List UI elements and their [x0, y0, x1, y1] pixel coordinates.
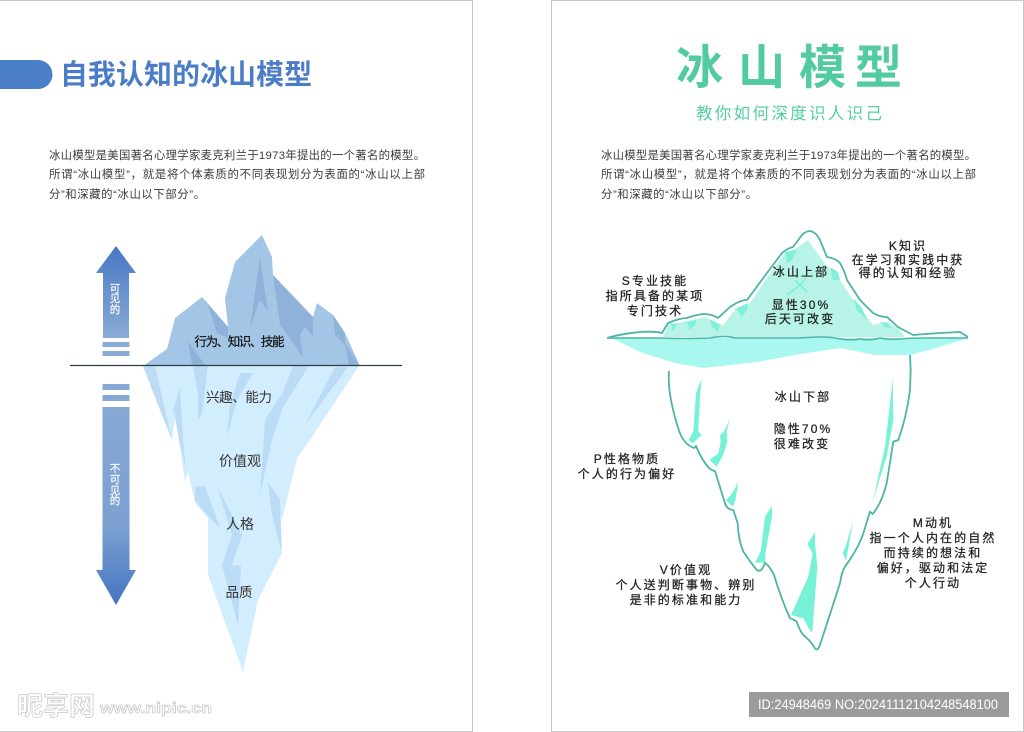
- callout: S skill: 专门技术: [627, 303, 683, 318]
- callout: V values: 个人送判断事物、辨别: [615, 577, 757, 592]
- callout: P personality: [578, 451, 676, 481]
- heading: self-awareness iceberg model: 自我认知的冰山模型: [60, 59, 312, 90]
- callout: K knowledge: 在学习和实践中获: [852, 252, 964, 267]
- callout: M motivation: M动机: [913, 516, 953, 530]
- callout: M motivation: 个人行动: [905, 576, 961, 590]
- callout: V values: V价值观: [660, 562, 712, 577]
- callout: V values: [615, 562, 757, 607]
- panel: left page: [0, 0, 472, 732]
- arrow: visible (up): 见: [110, 293, 120, 305]
- iceberg labels: [194, 335, 285, 600]
- subtitle: 教你如何深度识人识己: [696, 104, 882, 123]
- text block: left intro: [49, 148, 425, 201]
- iceberg labels: 价值观: [219, 453, 261, 469]
- label: above iceberg: 后天可改变: [765, 311, 835, 326]
- callout: S skill: 指所具备的某项: [606, 288, 704, 303]
- callout: S skill: S专业技能: [622, 273, 688, 288]
- callout: K knowledge: 得的认知和经验: [859, 265, 957, 280]
- waterline band: [612, 338, 968, 368]
- iceberg: underwater part: [143, 366, 359, 672]
- text block: right intro: 所谓“冰山模型”，就是将个体素质的不同表现划分为表面的“冰山以上部: [601, 167, 976, 181]
- arrow: invisible (down): 不: [110, 463, 121, 475]
- text block: right intro: 分”和深藏的“冰山以下部分”。: [601, 187, 757, 201]
- callout: M motivation: 偏好，驱动和法定: [877, 560, 989, 575]
- waterline: [70, 364, 402, 366]
- callout: K knowledge: [852, 239, 964, 280]
- watermark: [17, 691, 212, 721]
- iceberg outline diagram: [607, 231, 968, 649]
- arrow: visible (up): [96, 246, 136, 356]
- title: iceberg model: [676, 41, 902, 94]
- arrow: invisible (down): 见: [110, 485, 120, 497]
- waterline stroke: [607, 336, 968, 340]
- title: iceberg model: 冰: [676, 41, 723, 94]
- arrow: invisible (down): 可: [110, 474, 120, 486]
- label: above iceberg: 冰山上部: [773, 264, 829, 279]
- text block: right intro: [601, 148, 976, 201]
- callout: P personality: 个人的行为偏好: [578, 466, 676, 481]
- arrow: visible (up): 的: [110, 303, 120, 316]
- callout: K knowledge: K知识: [889, 239, 927, 253]
- lower outline: [669, 355, 911, 649]
- label: below iceberg: 很难改变: [774, 436, 830, 451]
- callout: M motivation: 而持续的想法和: [884, 545, 982, 560]
- iceberg labels: 人格: [226, 516, 254, 532]
- iceberg labels: 兴趣、能力: [206, 390, 272, 405]
- arrow: visible (up): 可: [110, 283, 120, 295]
- ID badge: ID:24948469 NO:20241112104248548100: [758, 697, 998, 712]
- heading pill: [0, 60, 52, 89]
- callout: V values: 是非的标准和能力: [630, 592, 742, 607]
- peak highlights: [670, 250, 890, 332]
- iceberg: above water part: [143, 235, 360, 366]
- ID badge: [749, 692, 1009, 717]
- callout: M motivation: [870, 516, 996, 590]
- title: iceberg model: 型: [855, 41, 902, 94]
- title: iceberg model: 山: [738, 41, 785, 94]
- panel: right page: [552, 0, 1024, 732]
- callout: P personality: P性格物质: [594, 451, 660, 466]
- arrow: invisible (down): [96, 384, 136, 605]
- label: above iceberg: [765, 264, 835, 326]
- iceberg labels: 品质: [226, 585, 252, 600]
- label: below iceberg: 冰山下部: [775, 389, 831, 404]
- top outline: [607, 231, 968, 338]
- underwater shards: [688, 378, 893, 632]
- label: above iceberg: 显性30%: [772, 298, 830, 312]
- title: iceberg model: 模: [799, 41, 846, 94]
- label: below iceberg: 隐性70%: [774, 422, 832, 436]
- watermark: 昵享网: [17, 691, 95, 721]
- mint peak fill: [663, 240, 905, 337]
- text block: left intro: 分”和深藏的“冰山以下部分”。: [49, 187, 205, 201]
- text block: left intro: 冰山模型是美国著名心理学家麦克利兰于1973年提出的一个著名的模型。: [49, 148, 425, 162]
- label: below iceberg: [774, 389, 832, 451]
- callout: S skill: [606, 273, 704, 318]
- callout: M motivation: 指一个人内在的自然: [870, 530, 996, 545]
- watermark: www.nipic.cn: [99, 700, 212, 717]
- text block: left intro: 所谓“冰山模型”，就是将个体素质的不同表现划分为表面的“冰山以上部: [49, 167, 425, 181]
- text block: right intro: 冰山模型是美国著名心理学家麦克利兰于1973年提出的一个著名的模型。: [601, 148, 976, 162]
- arrow: invisible (down): 的: [110, 494, 120, 507]
- iceberg labels: 行为、知识、技能: [194, 335, 285, 349]
